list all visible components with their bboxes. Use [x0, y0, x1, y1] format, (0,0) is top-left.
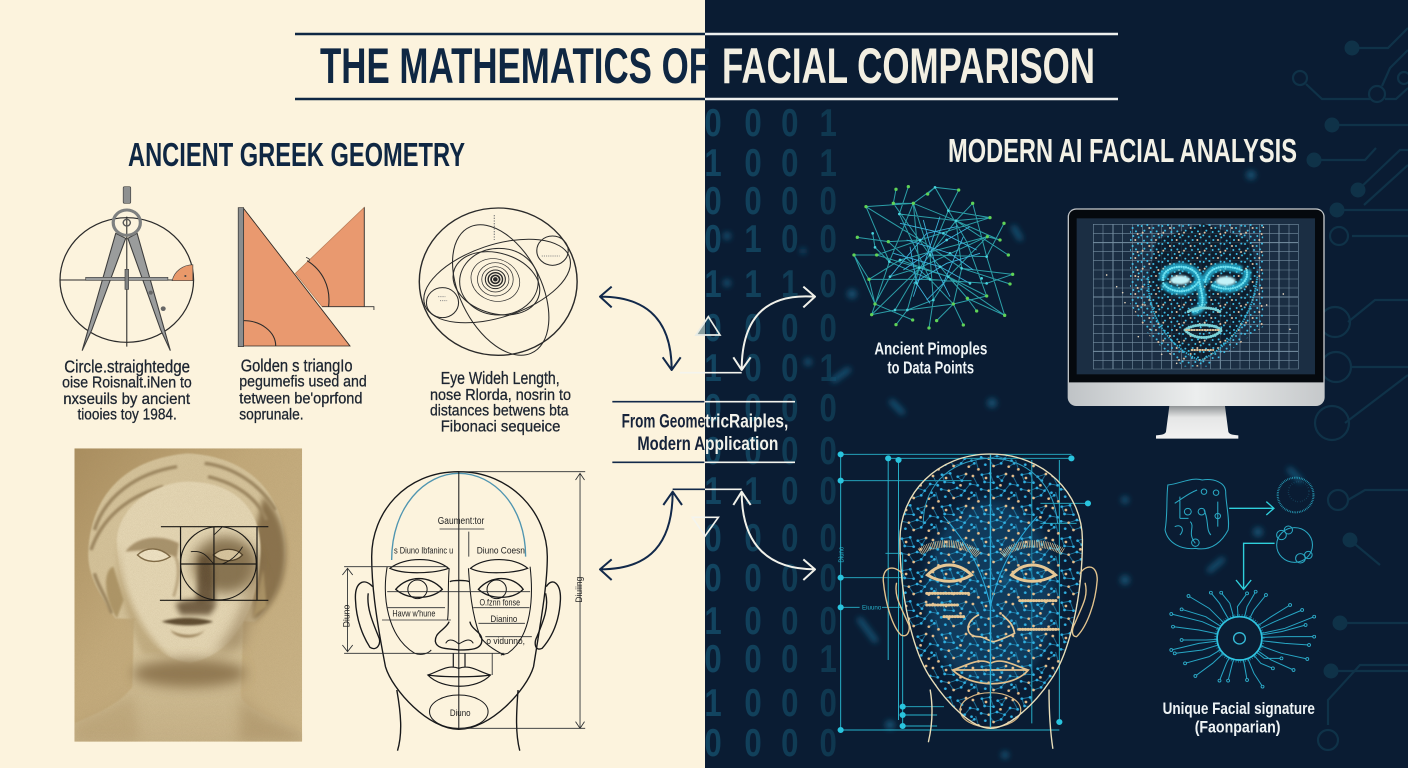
diagram labels	[342, 516, 584, 718]
arrow: lower left curved	[600, 492, 682, 580]
network caption: Ancient Pimoples	[874, 338, 987, 358]
background: faint circuit traces	[1293, 28, 1408, 750]
background: binary digit columns: 1000	[704, 682, 837, 725]
icon: Fibonacci spiral circle: distances betwens bta	[430, 401, 569, 420]
icon: triangle up	[696, 317, 720, 335]
panel: upper-right network and monitor	[854, 187, 1325, 439]
centre caption: tricRaiples,	[705, 411, 788, 432]
background: binary digit columns: 1110	[704, 263, 837, 306]
panel: centre transition connector	[600, 287, 815, 580]
panel: Greek geometry diagrams	[60, 187, 582, 436]
icon: Fibonacci spiral circle: nose Rlorda, nosrin to	[430, 386, 571, 404]
background: binary digit columns: 0000	[704, 307, 837, 350]
face made of points	[1107, 223, 1290, 370]
icon: golden triangles: tetween be'oprfond	[239, 389, 362, 407]
mouth	[428, 653, 490, 686]
signature caption: Unique Facial signature	[1163, 698, 1315, 718]
measurement frame	[838, 454, 1088, 730]
icon: compass and circle	[60, 187, 194, 423]
background: binary digit columns: 0000	[704, 180, 837, 223]
diagram labels: Diuno Coesn	[477, 545, 525, 555]
background: binary digit columns: 1000	[704, 600, 837, 643]
background: binary digit columns: 0100	[704, 218, 837, 261]
signature caption	[1163, 698, 1315, 737]
title	[295, 34, 1118, 99]
background: binary digit columns: 0000	[704, 517, 837, 560]
diagram labels: Diuiing	[574, 577, 584, 603]
icon: compass and circle: oise Roisnalt.iNen to	[62, 373, 192, 391]
arrow: blob to ring	[1229, 502, 1274, 515]
icon: face input blob with circuit	[1165, 478, 1314, 589]
icon: golden triangles: soprunale.	[239, 405, 304, 423]
image: classical marble bust with golden rectangle	[74, 448, 302, 742]
arrow: upper right curved	[733, 287, 815, 370]
icon: Fibonacci spiral circle	[412, 208, 582, 436]
cheek contours	[385, 567, 531, 655]
background: binary digit columns: 0000	[704, 430, 837, 473]
background: binary digit columns: 1001	[704, 347, 837, 390]
diagram labels: o vidunno,	[486, 636, 525, 646]
background: binary digit columns: 0000	[704, 387, 837, 430]
measurement frame: Diuno	[838, 546, 845, 563]
head outline	[900, 454, 1082, 728]
eyes	[396, 579, 523, 597]
icon: compass and circle: Circle.straightedge	[64, 357, 190, 377]
icon: compass and circle: tiooies toy 1984.	[77, 405, 177, 423]
arrow: ring to chip	[1236, 543, 1275, 589]
network caption	[874, 338, 987, 377]
background: binary digit columns: 0000	[704, 557, 837, 600]
title: FACIAL COMPARISON	[722, 38, 1095, 94]
heading: ancient Greek geometry: ANCIENT GREEK GEOMETRY	[128, 136, 465, 173]
arrow: lower right curved	[733, 492, 815, 580]
chart: data point network	[854, 187, 1013, 328]
panel: lower-right face analysis and signature	[838, 453, 1315, 748]
connector bars	[612, 373, 795, 489]
network caption: to Data Points	[887, 357, 974, 377]
nose	[435, 580, 482, 650]
icon: Fibonacci spiral circle: Eye Wideh Length,	[441, 369, 560, 388]
diagram labels: O.fznn fonse	[479, 597, 520, 607]
centre caption	[622, 411, 788, 455]
arrow: upper left curved	[600, 287, 681, 370]
icon: triangle down	[692, 517, 718, 536]
diagram labels: Dianino	[490, 614, 517, 624]
icon: golden triangles: pegumefis used and	[239, 372, 367, 391]
diagram labels: s Diuno Ibfaninc u	[394, 545, 453, 555]
background: binary digit columns	[704, 102, 837, 765]
diagram labels: Diuno	[342, 605, 352, 627]
diagram labels: Gaument:tor	[438, 516, 485, 527]
diagram labels: Diuno	[450, 708, 471, 718]
brows	[390, 560, 528, 573]
measurement lines	[342, 472, 585, 728]
centre caption: Modern A	[637, 434, 705, 455]
screen grid	[1093, 224, 1298, 369]
centre caption: pplication	[705, 434, 778, 455]
diagram: facial proportion line drawing	[342, 472, 585, 751]
icon: monitor showing face scan	[1068, 208, 1325, 439]
panel: right navy background	[705, 0, 1408, 768]
measurement frame: Eiuuno	[862, 604, 882, 611]
diagram: AI facial landmark mesh	[838, 453, 1097, 748]
icon: segmented ring	[1277, 528, 1312, 562]
background: bokeh specks	[723, 170, 1300, 759]
centre caption: From Geome	[622, 411, 705, 432]
background: binary digit columns: 1100	[704, 470, 837, 513]
panel: left cream background	[0, 0, 705, 768]
icon: dotted ring	[1278, 478, 1314, 512]
diagram labels: Havw w'hune	[392, 609, 435, 619]
background: binary digit columns: 0001	[704, 638, 837, 681]
background: binary digit columns: 0000	[704, 722, 837, 765]
panel: lower-left Greek bust and line-art face	[74, 448, 585, 751]
signature caption: (Faonparian)	[1195, 717, 1280, 737]
icon: golden triangles: Golden s triangIo	[241, 356, 353, 375]
background: binary digit columns: 0001	[704, 102, 837, 145]
icon: Fibonacci spiral circle: Fibonaci sequeice	[441, 417, 560, 436]
ears	[355, 582, 380, 649]
background: binary digit columns: 1001	[704, 142, 837, 185]
icon: unique facial signature chip	[1171, 592, 1314, 687]
icon: compass and circle: nxseuils by ancient	[63, 390, 190, 408]
icon: golden triangles	[238, 207, 374, 423]
title: THE MATHEMATICS OF	[320, 38, 710, 94]
